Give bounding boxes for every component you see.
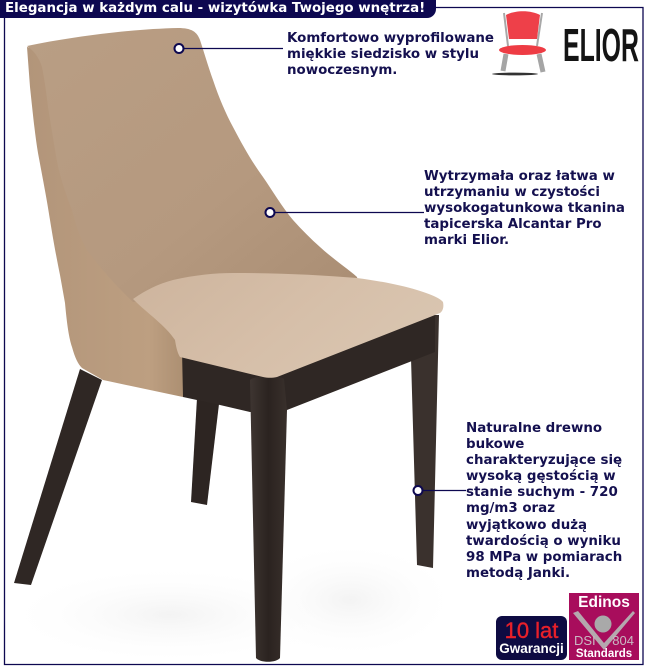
- text: utrzymaniu w czystości: [424, 185, 600, 200]
- connector and marker: [264, 207, 424, 218]
- text: wysokogatunkowa tkanina: [424, 201, 625, 216]
- text: wyjątkowo dużą: [466, 518, 587, 533]
- connector and marker: [174, 43, 283, 54]
- text: mg/m3 oraz: [466, 501, 555, 516]
- back cushion: [27, 28, 360, 302]
- badge code left: DSI: [574, 633, 596, 648]
- text: metodą Janki.: [466, 566, 570, 581]
- apron: [182, 305, 435, 412]
- text: [287, 31, 494, 78]
- text: [424, 169, 625, 248]
- text: wysoką gęstością w: [466, 469, 616, 484]
- callout: seat comfort: [174, 31, 494, 78]
- floor shadow left: [0, 565, 340, 665]
- text: bukowe: [466, 437, 524, 452]
- text: Komfortowo wyprofilowane: [287, 31, 494, 46]
- callout: wood legs: [412, 421, 622, 581]
- back left leg: [14, 369, 102, 585]
- connector and marker: [412, 485, 466, 496]
- badge: Edinos standards: [569, 593, 639, 660]
- badge emblem: [573, 611, 635, 650]
- text: [466, 421, 622, 581]
- callout: upholstery: [264, 169, 625, 248]
- floor shadow right: [240, 540, 460, 660]
- badge code right: 804: [612, 633, 634, 648]
- back right leg: [191, 398, 219, 505]
- icon: red chair: [492, 11, 546, 76]
- text: nowoczesnym.: [287, 63, 397, 78]
- seat: [133, 273, 443, 378]
- banner title: Elegancja w każdym calu - wizytówka Twojego wnętrza!: [5, 1, 425, 16]
- text: twardością o wyniku: [466, 534, 621, 549]
- text: tapicerska Alcantar Pro: [424, 217, 602, 232]
- front leg: [250, 376, 287, 662]
- top banner: [0, 0, 436, 18]
- badge standards: Standards: [576, 648, 632, 660]
- right front leg: [411, 315, 439, 568]
- text: stanie suchym - 720: [466, 485, 618, 500]
- outer side fabric: [27, 47, 190, 397]
- text: 98 MPa w pomiarach: [466, 550, 622, 565]
- text: miękkie siedzisko w stylu: [287, 47, 479, 62]
- text: marki Elior.: [424, 233, 509, 248]
- badge name: Edinos: [578, 594, 630, 611]
- text: Wytrzymała oraz łatwa w: [424, 169, 615, 184]
- badge label: Gwarancji: [499, 641, 564, 656]
- text: Naturalne drewno: [466, 421, 602, 436]
- logo: Elior: ELIOR: [563, 19, 639, 71]
- badge: 10 years warranty: [496, 616, 567, 660]
- text: charakteryzujące się: [466, 453, 622, 468]
- badge number: 10 lat: [505, 618, 558, 643]
